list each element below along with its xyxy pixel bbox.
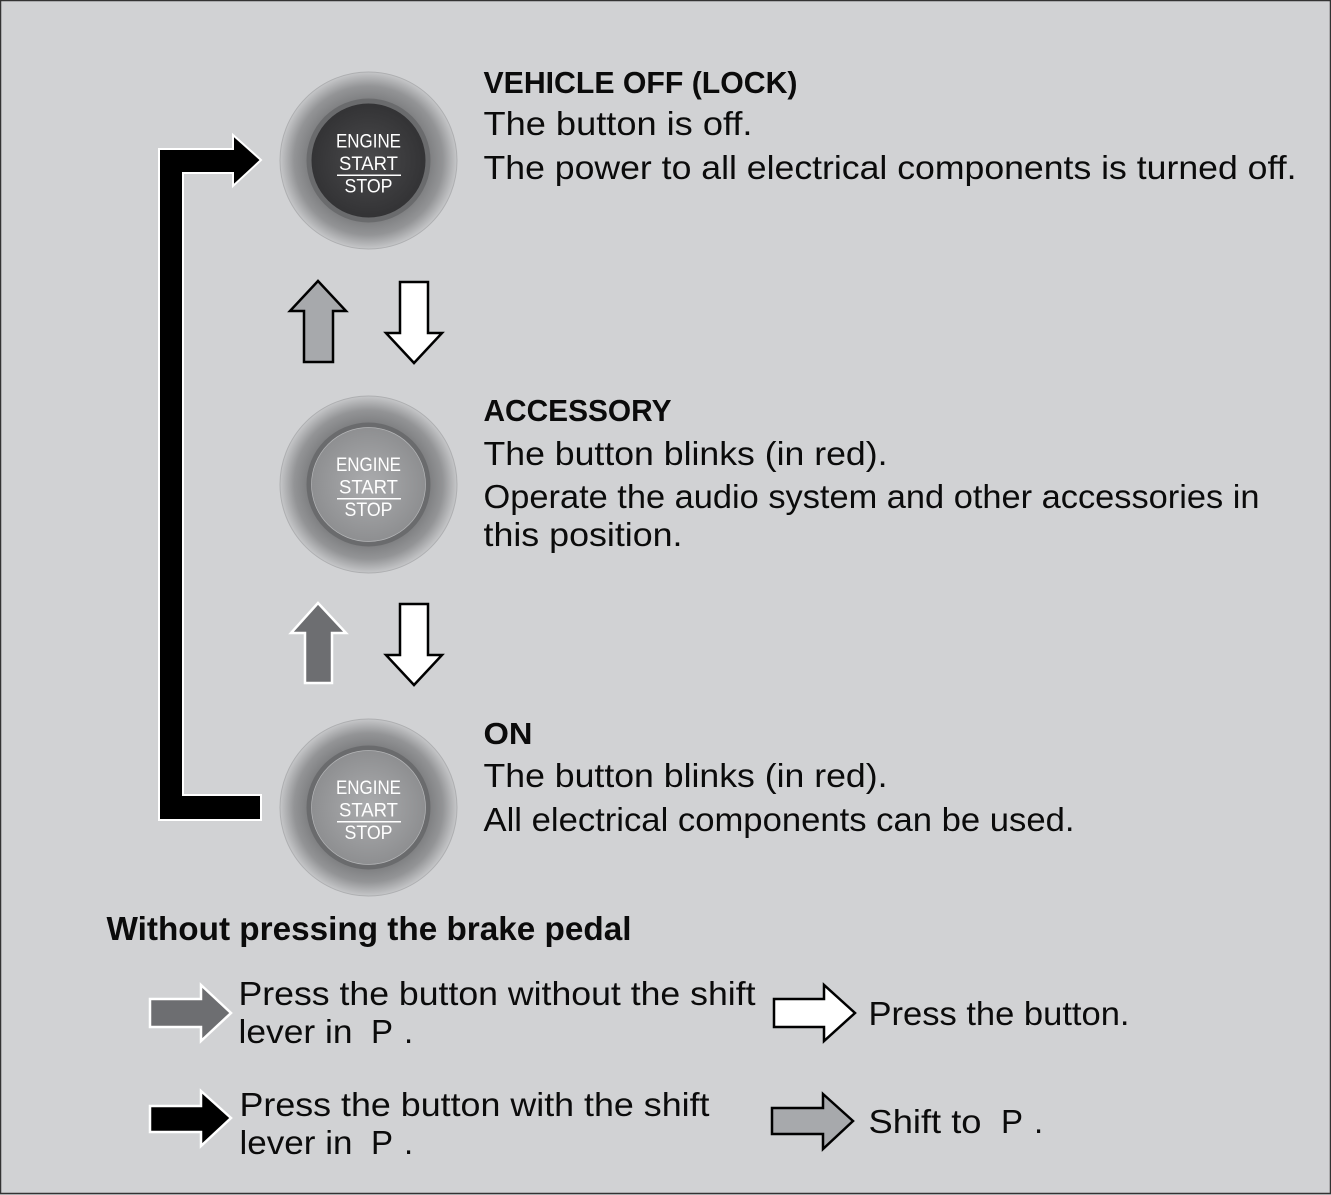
text block: on: ON <box>484 716 532 751</box>
text block: accessory: Operate the audio system and other accessories in <box>484 478 1260 515</box>
legend text: shift to P: . <box>1034 1103 1043 1140</box>
text block: accessory: The button blinks (in red). <box>484 435 888 472</box>
arrow: white down <box>386 282 442 363</box>
text block: on: All electrical components can be used. <box>484 801 1074 838</box>
button: on: ENGINE <box>336 778 401 799</box>
button: vehicle off: START <box>339 154 398 175</box>
button: accessory <box>280 396 457 573</box>
legend text: with shift lever in P: lever in <box>240 1124 352 1161</box>
black return arrow <box>159 135 261 820</box>
legend arrow: white <box>774 985 855 1041</box>
text block: vehicle off: The button is off. <box>484 105 752 142</box>
button: vehicle off: STOP <box>344 176 392 198</box>
legend text: with shift lever in P: . <box>404 1124 413 1161</box>
button: on: START <box>339 800 398 822</box>
arrow: gray up <box>290 281 346 362</box>
legend arrow: dark gray <box>150 985 231 1041</box>
legend text: shift to P <box>868 1103 1043 1140</box>
legend text: with shift lever in P <box>240 1086 710 1161</box>
text block: accessory: this position. <box>484 516 682 553</box>
legend text: shift to P: Shift to <box>868 1103 982 1140</box>
legend text: without shift lever in P <box>238 975 756 1050</box>
button: vehicle off <box>280 72 457 249</box>
text block: vehicle off: VEHICLE OFF (LOCK) <box>484 65 798 100</box>
legend heading: Without pressing the brake pedal <box>106 910 632 947</box>
button: vehicle off: ENGINE <box>336 132 401 152</box>
legend text: with shift lever in P: Press the button with the shift <box>240 1086 710 1123</box>
legend text: without shift lever in P: P <box>371 1013 393 1050</box>
text block: vehicle off <box>484 65 1296 186</box>
arrow: dark gray up <box>291 603 346 683</box>
text block: vehicle off: The power to all electrical components is turned off. <box>484 149 1296 186</box>
button: accessory: ENGINE <box>336 455 401 476</box>
text block: accessory: ACCESSORY <box>484 393 672 428</box>
button: on <box>280 719 457 896</box>
legend text: without shift lever in P: lever in <box>238 1013 352 1050</box>
text block: on <box>484 716 1074 838</box>
legend arrow: black <box>150 1091 231 1146</box>
text block: accessory <box>484 393 1260 553</box>
button: accessory: STOP <box>344 500 392 521</box>
legend arrow: gray <box>772 1094 853 1149</box>
legend text: press the button: Press the button. <box>868 995 1130 1032</box>
button: on: STOP <box>344 823 392 844</box>
arrow: white down <box>386 604 442 685</box>
button: accessory: START <box>339 478 398 498</box>
legend text: with shift lever in P: P <box>371 1124 393 1161</box>
text block: on: The button blinks (in red). <box>484 757 888 794</box>
legend text: without shift lever in P: . <box>404 1013 413 1050</box>
legend text: shift to P: P <box>1001 1103 1023 1140</box>
legend text: without shift lever in P: Press the button without the shift <box>238 975 756 1012</box>
